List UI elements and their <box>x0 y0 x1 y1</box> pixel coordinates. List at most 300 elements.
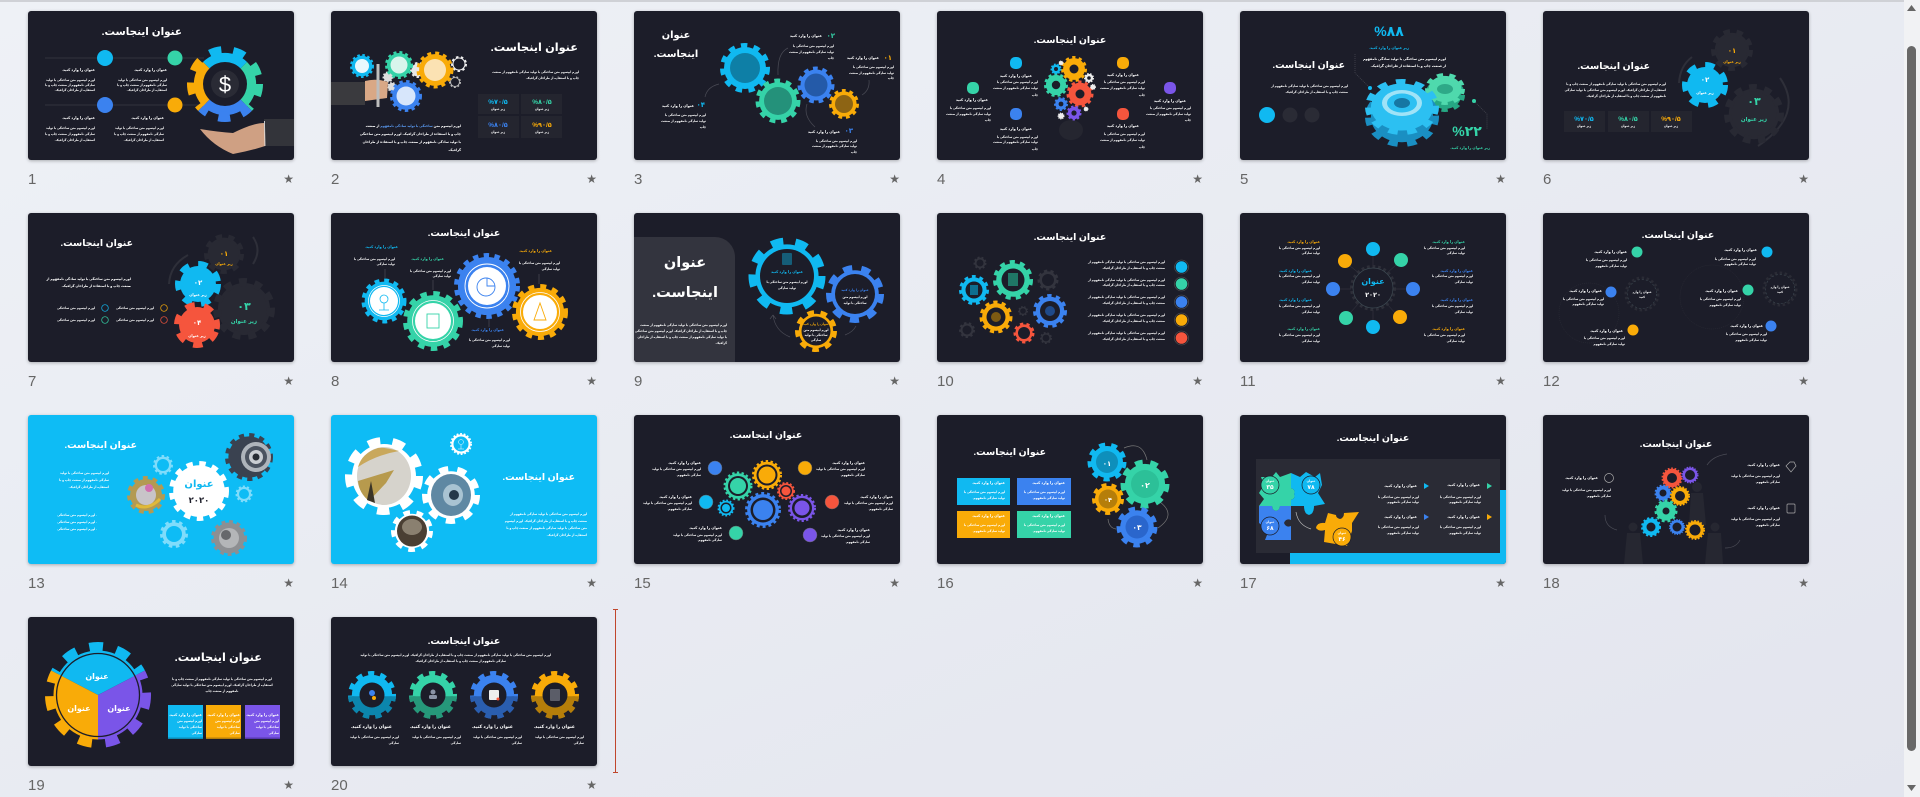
text green: لورم ایپسوم متن ساختگی با <box>950 106 991 110</box>
title: عنوان اینجاست. <box>1640 438 1712 450</box>
text yellow: تولید سادگی <box>542 267 560 271</box>
card yellow <box>957 511 1010 538</box>
cyan gear 02 <box>179 265 217 303</box>
text mid left <box>643 495 692 511</box>
text block top left: لورم ایپسوم متن ساختگی با تولید <box>46 78 95 82</box>
title: عنوان اینجاست. <box>491 42 578 54</box>
card purple <box>245 705 280 739</box>
dark gear 01 <box>207 237 241 271</box>
stat boxes <box>478 94 562 138</box>
check list: لورم ایپسوم متن ساختگی <box>116 318 154 322</box>
card purple: ساختگی با تولید <box>256 725 279 729</box>
body text: لورم ایپسوم متن ساختگی با تولید سادگی نامفهوم از صنعت <box>640 323 727 327</box>
text right 4 <box>1424 327 1465 343</box>
list item yellow: صنعت چاپ و با استفاده از طراحان گرافیک. <box>1102 319 1165 323</box>
text 1: عنوان را وارد کنید. <box>1447 483 1480 487</box>
badge 78: ۷۸ <box>1307 485 1315 491</box>
text 03: ۰۳ <box>844 128 854 135</box>
text 03: عنوان را وارد کنید <box>808 130 840 134</box>
description <box>1270 84 1348 94</box>
text block bottom left: عنوان را وارد کنید. <box>62 116 95 120</box>
title: عنوان اینجاست. <box>1642 229 1714 241</box>
text cyan: لورم ایپسوم متن ساختگی با <box>997 80 1038 84</box>
slide 1 <box>28 11 294 160</box>
silhouettes <box>1624 482 1723 564</box>
text right 2: لورم ایپسوم متن ساختگی با <box>1432 274 1473 278</box>
dollar gear: $ <box>219 72 231 97</box>
body text <box>505 512 587 537</box>
list item yellow: لورم ایپسوم متن ساختگی با تولید سادگی نامفهوم از <box>1087 313 1165 317</box>
star 13: ★ <box>283 576 294 590</box>
description: صنعت چاپ و با استفاده از طراحان گرافیک. <box>1285 90 1348 94</box>
badge 68: ۶۸ <box>1266 526 1274 532</box>
text top left: سادگی نامفهوم. <box>677 473 701 477</box>
red gear 04 <box>172 300 222 350</box>
arcs <box>1679 57 1789 146</box>
body text <box>171 677 273 693</box>
text 4: سادگی <box>574 741 584 745</box>
text 2 <box>1586 250 1627 268</box>
badge 68: عنوان <box>1266 520 1274 524</box>
text 01 <box>847 55 894 80</box>
text block top left: استفاده از طراحان گرافیک. <box>55 88 95 92</box>
body text: نامفهوم از صنعت چاپ و با استفاده از طراحان گرافیک. <box>1586 94 1666 98</box>
body text: چاپ و با استفاده از طراحان گرافیک. لورم ایپسوم متن ساختگی <box>635 329 727 333</box>
body text <box>635 323 727 345</box>
stat boxes: %۸۰/۵ <box>488 122 508 129</box>
gear green <box>412 674 454 716</box>
text 04 <box>661 102 706 129</box>
slide number 12: 12 <box>1543 373 1560 390</box>
dark gear 01: ۰۱ <box>1728 48 1736 55</box>
description <box>492 70 579 80</box>
text purple: تولید سادگی نامفهوم از صنعت <box>1146 112 1191 116</box>
text left 2: لورم ایپسوم متن ساختگی با <box>1279 274 1320 278</box>
text 3 <box>1700 289 1741 307</box>
text 1: تولید سادگی نامفهوم <box>1725 262 1756 266</box>
text block top right: سادگی نامفهوم از صنعت چاپ و با <box>117 83 167 87</box>
text 3: عنوان را وارد کنید. <box>1705 289 1738 293</box>
text 2: عنوان را وارد کنید. <box>410 724 451 729</box>
text bottom right <box>821 528 870 544</box>
check list: لورم ایپسوم متن ساختگی <box>116 306 154 310</box>
title: عنوان اینجاست. <box>973 446 1046 458</box>
red gear 04: ۰۴ <box>193 320 202 327</box>
badge 35: ۳۵ <box>1266 484 1274 491</box>
text yellow: تولید سادگی نامفهوم از صنعت <box>1100 86 1145 90</box>
text blue: لورم ایپسوم متن ساختگی با <box>469 338 510 342</box>
text 01: لورم ایپسوم متن ساختگی با <box>853 65 894 69</box>
text yellow: لورم ایپسوم متن ساختگی با <box>519 261 560 265</box>
cyan gear: عنوان را وارد کنید <box>771 270 804 274</box>
badge 46: ۴۶ <box>1338 537 1346 543</box>
text top left: لورم ایپسوم متن ساختگی با تولید <box>652 467 701 471</box>
title: عنوان <box>662 30 690 41</box>
list item red: لورم ایپسوم متن ساختگی با تولید سادگی نامفهوم از <box>1087 331 1165 335</box>
body text <box>59 471 109 489</box>
star 5: ★ <box>1495 172 1506 186</box>
text right 2 <box>1731 506 1780 527</box>
text 1: سادگی <box>389 741 399 745</box>
text 1: عنوان را وارد کنید. <box>351 724 392 729</box>
body text: استفاده از طراحان گرافیک. لورم ایپسوم متن ساختگی با تولید سادگی <box>171 683 273 687</box>
paragraph <box>45 277 131 288</box>
text yellow: لورم ایپسوم متن ساختگی با <box>1104 80 1145 84</box>
dark gear 03: زیر عنوان <box>1741 117 1767 123</box>
text 4: عنوان را وارد کنید. <box>1569 289 1602 293</box>
text mid right: عنوان را وارد کنید. <box>860 495 893 499</box>
paragraph: صنعت چاپ و با استفاده از طراحان گرافیک. <box>62 284 131 288</box>
text 3: تولید سادگی نامفهوم <box>1710 303 1741 307</box>
text 6: لورم ایپسوم متن ساختگی با <box>1584 336 1625 340</box>
text blue: تولید سادگی <box>492 344 510 348</box>
insertion marker <box>613 609 618 773</box>
description: لورم ایپسوم متن ساختگی با تولید سادگی نامفهوم از <box>1270 84 1348 88</box>
text right 2: سادگی نامفهوم. <box>1756 523 1780 527</box>
text block bottom left <box>45 116 95 142</box>
text left 1: لورم ایپسوم متن ساختگی با <box>1279 246 1320 250</box>
lightbulb gears <box>1046 58 1096 119</box>
photo gear gold <box>350 442 418 510</box>
text right 3: لورم ایپسوم متن ساختگی با <box>1432 304 1473 308</box>
text 4: تولید سادگی نامفهوم. <box>1387 531 1419 535</box>
big gear <box>52 649 144 741</box>
body text <box>1565 82 1666 98</box>
icon tiles <box>967 57 1176 120</box>
text left <box>1562 476 1611 498</box>
green gear <box>407 295 459 347</box>
title: عنوان اینجاست. <box>1272 59 1345 71</box>
card yellow: عنوان را وارد کنید. <box>207 713 240 717</box>
badge 35: عنوان <box>1266 479 1274 483</box>
gear 03: ۰۳ <box>1132 523 1142 532</box>
central ring <box>1352 268 1394 308</box>
text mid right: لورم ایپسوم متن ساختگی با تولید <box>844 501 893 505</box>
body text: لورم ایپسوم متن ساختگی با تولید <box>60 471 109 475</box>
card blue <box>1017 478 1071 505</box>
slide 15 <box>634 415 900 564</box>
text 03: چاپ <box>851 150 857 154</box>
yellow gear: سادگی <box>811 338 821 342</box>
text 02: عنوان را وارد کنید <box>790 34 822 38</box>
slide number 19: 19 <box>28 777 45 794</box>
list item red: صنعت چاپ و با استفاده از طراحان گرافیک. <box>1102 337 1165 341</box>
text right 1: عنوان را وارد کنید. <box>1747 463 1780 467</box>
text block top left: سادگی نامفهوم از صنعت چاپ و با <box>45 83 95 87</box>
body text: با تولید سادگی نامفهوم از صنعت چاپ و با استفاده از طراحان <box>637 335 727 339</box>
text block bottom right: عنوان را وارد کنید. <box>131 116 164 120</box>
slide number 16: 16 <box>937 575 954 592</box>
text blue: عنوان را وارد کنید. <box>471 328 504 332</box>
accent L <box>1290 490 1506 564</box>
text 1 <box>1440 483 1481 504</box>
text 2: سادگی <box>451 741 461 745</box>
text right 4: لورم ایپسوم متن ساختگی با <box>1424 333 1465 337</box>
slide number 20: 20 <box>331 777 348 794</box>
cyan gear 02: زیر عنوان <box>189 293 207 297</box>
dark gear 03 <box>1728 88 1780 140</box>
text 5: عنوان را وارد کنید. <box>1730 324 1763 328</box>
card purple: لورم ایپسوم متن <box>254 719 279 723</box>
text 3: تولید سادگی نامفهوم. <box>1449 531 1481 535</box>
blue gear: لورم ایپسوم متن <box>843 295 867 299</box>
slide number 6: 6 <box>1543 171 1551 188</box>
text 3: لورم ایپسوم متن ساختگی با <box>1440 525 1481 529</box>
bulb base <box>1059 120 1083 140</box>
arrows <box>705 48 869 127</box>
body text: صنعت چاپ و با استفاده از طراحان گرافیک. لورم ایپسوم <box>505 519 587 523</box>
stat 88 <box>1369 23 1409 50</box>
gear blue <box>473 674 515 716</box>
text red: چاپ <box>1139 145 1145 149</box>
text 5 <box>1726 324 1767 342</box>
slide 20 <box>331 617 597 766</box>
text block bottom left: لورم ایپسوم متن ساختگی با تولید <box>46 126 95 130</box>
star 12: ★ <box>1798 374 1809 388</box>
text 3 <box>1440 515 1481 535</box>
text 3: لورم ایپسوم متن ساختگی با <box>1700 297 1741 301</box>
slide 5 <box>1240 11 1506 160</box>
star 3: ★ <box>889 172 900 186</box>
text left 2 <box>1279 269 1320 284</box>
text left 2: عنوان را وارد کنید. <box>1279 269 1312 273</box>
stat boxes <box>1564 111 1692 132</box>
title: عنوان اینجاست. <box>1577 60 1650 72</box>
left panel <box>634 237 735 362</box>
text 01: ۰۱ <box>883 55 892 62</box>
arrows <box>770 315 856 337</box>
card blue: تولید سادگی نامفهوم. <box>1033 496 1065 500</box>
text 4: عنوان را وارد کنید. <box>534 724 575 729</box>
gear cluster <box>351 53 466 110</box>
slide number 8: 8 <box>331 373 339 390</box>
text right 3: عنوان را وارد کنید. <box>1440 298 1473 302</box>
faint orbits <box>1559 265 1744 343</box>
text 4: تولید سادگی نامفهوم <box>1573 302 1604 306</box>
title: عنوان اینجاست. <box>730 429 802 441</box>
star 16: ★ <box>1192 576 1203 590</box>
star 11: ★ <box>1495 374 1506 388</box>
text green: عنوان را وارد کنید <box>956 98 988 102</box>
text top right: عنوان را وارد کنید. <box>832 461 865 465</box>
text 2 <box>410 724 461 745</box>
petals <box>1326 242 1420 334</box>
description: لورم ایپسوم متن ساختگی با تولید سادگی نامفهوم از صنعت <box>492 70 579 74</box>
text red: لورم ایپسوم متن ساختگی با <box>1104 132 1145 136</box>
text 03: لورم ایپسوم متن ساختگی با <box>816 139 857 143</box>
title: عنوان <box>664 255 706 271</box>
stat 88: زیر عنوان را وارد کنید. <box>1369 46 1409 50</box>
text blue <box>993 127 1038 151</box>
card cyan: عنوان را وارد کنید. <box>169 713 202 717</box>
text 4: لورم ایپسوم متن ساختگی با <box>1563 297 1604 301</box>
stat 22 <box>1450 123 1490 150</box>
text top left <box>652 461 701 477</box>
stat boxes: زیر عنوان <box>1577 124 1591 128</box>
gear 04 <box>1094 485 1122 513</box>
gear 02 <box>1124 463 1166 505</box>
text 01: چاپ <box>888 76 894 80</box>
big gear: عنوان <box>85 672 109 681</box>
list item red <box>1087 331 1188 345</box>
text left 4: عنوان را وارد کنید. <box>1287 327 1320 331</box>
text left 3 <box>1279 298 1320 314</box>
text red <box>1100 124 1145 149</box>
text 2 <box>1378 484 1419 504</box>
text top right: سادگی نامفهوم. <box>841 473 865 477</box>
cyan gear 02: ۰۲ <box>1701 77 1710 84</box>
stat boxes: زیر عنوان <box>491 130 505 134</box>
text top right <box>816 461 865 477</box>
text block bottom right: لورم ایپسوم متن ساختگی با تولید <box>115 126 164 130</box>
arrows <box>1605 454 1740 548</box>
slide number 18: 18 <box>1543 575 1560 592</box>
text top right: لورم ایپسوم متن ساختگی با تولید <box>816 467 865 471</box>
star 9: ★ <box>889 374 900 388</box>
text yellow: عنوان را وارد کنید. <box>519 249 552 253</box>
text right 1: سادگی نامفهوم. <box>1756 480 1780 484</box>
list item blue: لورم ایپسوم متن ساختگی با تولید سادگی نامفهوم از <box>1087 295 1165 299</box>
text purple <box>1146 99 1191 122</box>
star 4: ★ <box>1192 172 1203 186</box>
slide number 15: 15 <box>634 575 651 592</box>
title: عنوان اینجاست. <box>175 652 262 664</box>
badge 78 <box>1302 476 1320 494</box>
dark gear 01: زیر عنوان <box>1723 60 1741 64</box>
body text: لورم ایپسوم متن ساختگی با تولید سادگی نامفهوم از <box>509 512 587 516</box>
slide 9 <box>634 213 900 362</box>
check list: لورم ایپسوم متن ساختگی <box>57 318 95 322</box>
text right 1: لورم ایپسوم متن ساختگی با تولید <box>1731 474 1780 478</box>
slide number 7: 7 <box>28 373 36 390</box>
gear 01 <box>1090 445 1124 479</box>
dark gear 01: ۰۱ <box>220 251 228 258</box>
star 20: ★ <box>586 778 597 792</box>
text 1: عنوان را وارد کنید. <box>1724 248 1757 252</box>
title: عنوان اینجاست. <box>428 635 500 647</box>
dark gear 01 <box>1714 32 1750 68</box>
cyan gear 02: زیر عنوان <box>1696 91 1714 95</box>
card yellow: عنوان را وارد کنید. <box>972 514 1005 518</box>
bullet list: - لورم ایپسوم متن ساختگی <box>57 513 97 517</box>
dark gear 03: ۰۳ <box>237 301 251 313</box>
card purple: سادگی <box>269 731 279 735</box>
dark gear 03: ۰۳ <box>1747 96 1761 108</box>
list item yellow <box>1087 313 1188 327</box>
body text: نامفهوم از صنعت چاپ <box>206 689 238 693</box>
text green <box>946 98 991 122</box>
text 2: لورم ایپسوم متن ساختگی با تولید <box>412 735 461 739</box>
text green: چاپ <box>985 118 991 122</box>
card green: عنوان را وارد کنید. <box>1032 514 1065 518</box>
stat boxes: زیر عنوان <box>491 107 505 111</box>
central white gear <box>173 465 225 517</box>
star 17: ★ <box>1495 576 1506 590</box>
body text: استفاده از طراحان گرافیک. <box>547 533 587 537</box>
small outline gear <box>451 434 471 454</box>
slide 2 <box>331 11 597 160</box>
cyan gear 02: ۰۲ <box>194 280 203 287</box>
bullet list <box>57 513 97 531</box>
text 04: تولید سادگی نامفهوم از صنعت <box>661 119 706 123</box>
text right 1 <box>1731 463 1780 484</box>
text bottom right: لورم ایپسوم متن ساختگی با تولید <box>821 534 870 538</box>
text mid right: سادگی نامفهوم. <box>869 507 893 511</box>
star 19: ★ <box>283 778 294 792</box>
text red: تولید سادگی نامفهوم از صنعت <box>1100 138 1145 142</box>
stat boxes: %۷۰/۵ <box>1574 116 1594 123</box>
text 1: لورم ایپسوم متن ساختگی با <box>1715 257 1756 261</box>
text 4: لورم ایپسوم متن ساختگی با <box>1378 525 1419 529</box>
card blue: عنوان را وارد کنید. <box>1032 481 1065 485</box>
isometric blue gear <box>1370 83 1434 143</box>
cyan gear 02 <box>1686 66 1724 104</box>
text 4 <box>1378 515 1419 535</box>
photo gear gold <box>129 478 163 512</box>
yellow gear: لورم ایپسوم متن <box>804 328 828 332</box>
slide number 10: 10 <box>937 373 954 390</box>
title: اینجاست. <box>654 49 698 60</box>
paragraph: از صنعت چاپ و با استفاده از طراحان گرافیک. <box>1371 63 1446 68</box>
card purple: عنوان را وارد کنید. <box>246 713 279 717</box>
body text: متن ساختگی با تولید سادگی نامفهوم از صنعت چاپ و با <box>506 526 587 530</box>
text 1 <box>1715 248 1757 266</box>
paragraph <box>360 124 462 152</box>
stat boxes: زیر عنوان <box>1621 124 1635 128</box>
text mid left: سادگی نامفهوم. <box>668 507 692 511</box>
dark gear 01: زیر عنوان <box>215 262 233 266</box>
text block bottom right: سادگی نامفهوم از صنعت چاپ و با <box>114 132 164 136</box>
text 02 <box>789 33 836 60</box>
text right 2: عنوان را وارد کنید. <box>1747 506 1780 510</box>
right ring gear <box>1764 273 1796 305</box>
right ring gear: کنید <box>1777 290 1783 294</box>
text 6: تولید سادگی نامفهوم <box>1594 342 1625 346</box>
star 14: ★ <box>586 576 597 590</box>
cyan gear <box>364 281 404 321</box>
photo gear dark <box>228 436 271 478</box>
paragraph <box>1363 56 1446 68</box>
bullet list: - لورم ایپسوم متن ساختگی <box>57 527 97 531</box>
description: چاپ و با استفاده از طراحان گرافیک. <box>526 76 579 80</box>
text left 4: تولید سادگی <box>1302 339 1320 343</box>
text yellow <box>1100 73 1145 97</box>
slide number 14: 14 <box>331 575 348 592</box>
slide 8 <box>331 213 597 362</box>
text yellow: عنوان را وارد کنید <box>1107 73 1139 77</box>
text 4: عنوان را وارد کنید. <box>1384 515 1417 519</box>
outline gears <box>154 456 251 546</box>
central white gear: عنوان <box>184 479 214 490</box>
text block top left: عنوان را وارد کنید. <box>62 68 95 72</box>
text block bottom right <box>114 116 164 142</box>
text 1: تولید سادگی نامفهوم. <box>1449 500 1481 504</box>
text red: عنوان را وارد کنید <box>1107 124 1139 128</box>
star 8: ★ <box>586 374 597 388</box>
text 04: عنوان را وارد کنید <box>662 104 694 108</box>
dollar gear <box>192 51 258 117</box>
text right 3 <box>1432 298 1473 314</box>
text block top left <box>45 68 95 92</box>
text right 2 <box>1432 269 1473 284</box>
stat boxes: %۸۰/۵ <box>1618 116 1638 123</box>
dark gear 03: زیر عنوان <box>231 319 257 325</box>
text left: لورم ایپسوم متن ساختگی با تولید <box>1562 488 1611 492</box>
body text: لورم ایپسوم متن ساختگی با تولید سادگی نامفهوم از صنعت چاپ و با <box>172 677 272 681</box>
title: اینجاست. <box>652 285 718 301</box>
stat boxes: %۸۰/۵ <box>532 99 552 106</box>
card cyan: تولید سادگی نامفهوم. <box>973 496 1005 500</box>
